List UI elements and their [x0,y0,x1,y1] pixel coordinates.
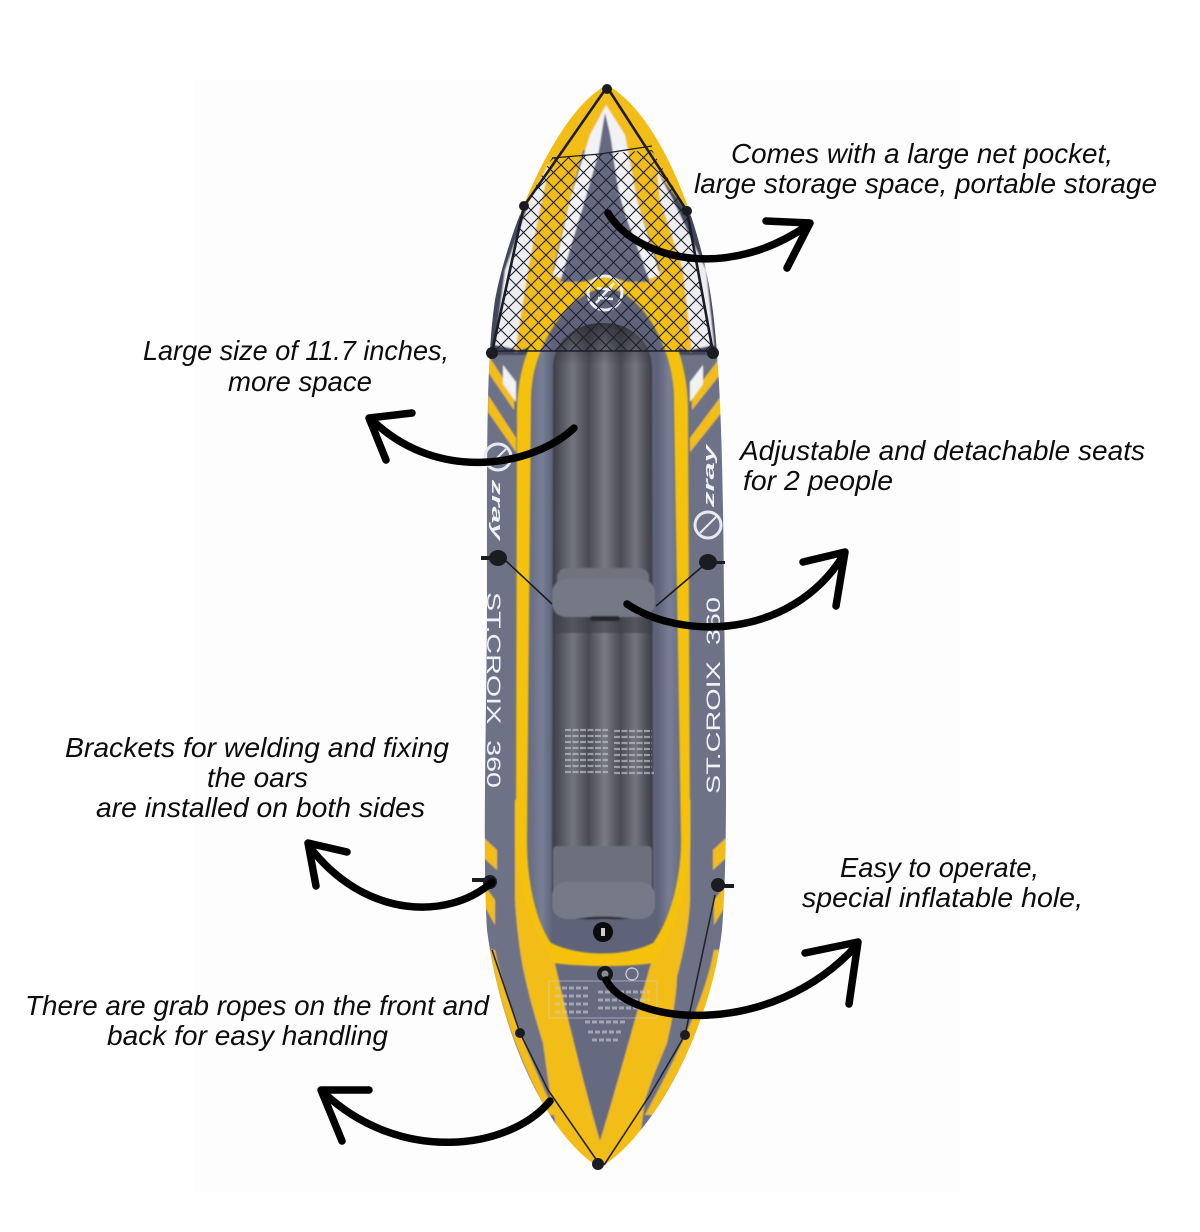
callout: size [143,335,449,397]
arrow: grab ropes [321,1090,550,1142]
callout: oar brackets [65,732,449,823]
seat straps [505,560,703,606]
brand right: zray [701,444,718,509]
inflation valve [597,966,638,982]
cargo net [492,91,714,352]
yellow shoulder fill under triangle [538,270,670,332]
callout: size: more space [228,366,372,397]
callout: seats [738,435,1145,496]
arrow: net pocket [608,213,810,268]
callout: size: Large size of 11.7 inches, [143,335,449,366]
callout: seats: Adjustable and detachable seats [738,435,1145,466]
callout: grab ropes [25,990,490,1051]
callout: oar brackets: Brackets for welding and fixing [65,732,449,763]
bow outer white stripes [494,162,550,350]
bow dark flanks [490,170,716,356]
floor divider shadow [553,615,652,633]
floor spec label [565,730,654,773]
photo background [195,80,960,1192]
stern outer yellow trim [490,950,556,1115]
kayak [470,70,740,1180]
bow yellow nose [520,88,691,216]
cockpit tube [527,288,681,954]
callout: net pocket: large storage space, portable storage [694,168,1157,199]
cockpit floor [552,323,653,920]
bow yellow stripes [515,135,587,352]
drain hole [593,922,613,942]
stern warning label [549,981,657,1040]
callout: inflation [802,852,1083,913]
bungee ropes [492,895,715,1165]
callout: inflation: special inflatable hole, [802,882,1083,913]
front seat [552,568,655,621]
brand left: zray [488,478,505,541]
cockpit logo [588,276,622,310]
arrow: oar brackets [308,843,492,907]
callout: grab ropes: There are grab ropes on the front and [25,990,490,1021]
callout: oar brackets: the oars [207,762,308,793]
stern grey V [553,950,655,1141]
hull [484,88,726,1166]
callout: oar brackets: are installed on both sides [96,792,425,823]
arrow: seats [627,552,845,627]
side logo right [695,512,721,538]
callout: net pocket: Comes with a large net pocket, [731,138,1113,169]
callout: inflation: Easy to operate, [840,852,1039,883]
stern yellow hull [515,800,690,1175]
callout: net pocket [694,138,1157,199]
arrow: inflation [606,942,858,1015]
side chevrons right [690,360,718,410]
cleats [472,84,734,1170]
side chevrons left [488,355,514,410]
side logo left [485,444,511,470]
bow grey triangle [560,113,650,282]
model name left: ST.CROIX 360 [482,592,503,788]
cockpit yellow surround [516,277,690,966]
arrow: size [369,413,574,462]
callout: seats: for 2 people [743,465,893,496]
rear seat [552,846,655,919]
model name right: ST.CROIX 360 [704,597,725,794]
bow white stripes [553,105,606,280]
floor shadow [553,323,652,370]
stern side accents [484,838,497,925]
callout: grab ropes: back for easy handling [107,1020,388,1051]
